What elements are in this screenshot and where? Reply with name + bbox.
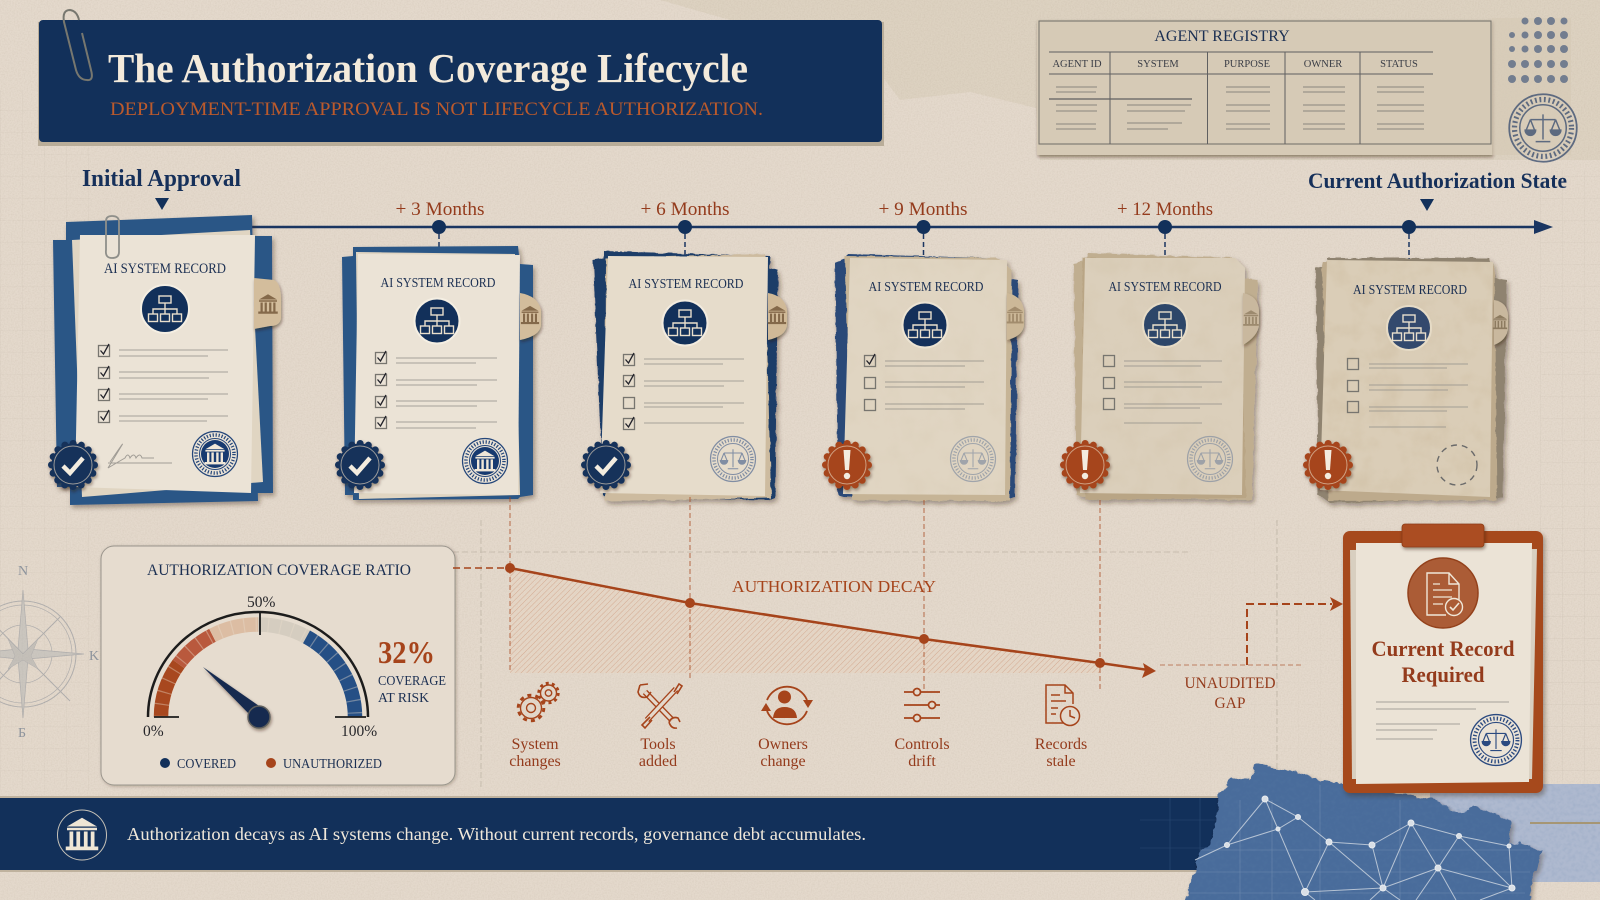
registry column headers: OWNER xyxy=(1304,59,1342,70)
icon: records stale xyxy=(1046,685,1080,726)
footer band xyxy=(0,796,1240,872)
month labels: + 6 Months xyxy=(640,200,730,220)
gauge title: AUTHORIZATION COVERAGE RATIO xyxy=(147,562,411,579)
aged stains xyxy=(1320,260,1493,497)
callout label: GAP xyxy=(1214,695,1246,712)
missing seal placeholder xyxy=(1437,445,1477,485)
icon: footer institution xyxy=(58,810,106,860)
record title: AI SYSTEM RECORD xyxy=(868,280,984,295)
org icon xyxy=(1387,306,1431,350)
org icon xyxy=(662,300,708,346)
seal xyxy=(462,438,508,484)
checklist xyxy=(624,353,744,430)
card 5: twelve months xyxy=(1064,253,1259,500)
tab xyxy=(254,278,281,329)
tab xyxy=(1243,293,1259,345)
registry seal xyxy=(1509,94,1577,162)
driver labels xyxy=(509,736,1087,770)
icon: system changes xyxy=(518,683,558,721)
checklist xyxy=(864,354,984,410)
card 6: current state xyxy=(1306,258,1508,503)
compass rose xyxy=(0,590,84,718)
panel: authorization coverage ratio gauge xyxy=(101,546,455,785)
checklist xyxy=(376,351,497,428)
clip xyxy=(1402,524,1484,547)
record message: Required xyxy=(1402,662,1484,687)
gauge scale labels: 0% xyxy=(143,723,164,740)
record title: AI SYSTEM RECORD xyxy=(380,276,496,291)
record message xyxy=(1372,636,1514,687)
needle xyxy=(203,667,270,728)
driver labels: added xyxy=(639,753,677,770)
tab xyxy=(520,293,541,340)
tab xyxy=(1007,293,1024,340)
card 3: six months xyxy=(584,251,787,501)
driver labels: Records xyxy=(1035,736,1087,753)
callout label: UNAUDITED xyxy=(1184,675,1276,692)
dashed arrow xyxy=(1247,604,1332,665)
coverage value: 32% xyxy=(378,634,435,670)
coverage caption: COVERAGE xyxy=(378,673,446,688)
legend xyxy=(160,756,382,771)
checklist xyxy=(98,344,228,422)
initial approval marker xyxy=(155,198,169,210)
registry column headers: PURPOSE xyxy=(1224,59,1270,70)
tab xyxy=(768,293,787,340)
record title: AI SYSTEM RECORD xyxy=(104,261,226,277)
title banner xyxy=(38,20,884,146)
org icon xyxy=(1143,303,1187,347)
driver labels: change xyxy=(760,753,806,770)
coverage caption xyxy=(378,673,446,705)
registry column headers: AGENT ID xyxy=(1052,59,1102,70)
icon: controls drift xyxy=(904,688,940,722)
checklist xyxy=(1104,356,1222,423)
icon: banner paperclip xyxy=(64,10,92,80)
record message: Current Record xyxy=(1372,636,1514,661)
org icon xyxy=(141,285,189,333)
tab xyxy=(1493,300,1508,345)
month labels: + 12 Months xyxy=(1117,200,1213,220)
subtitle: DEPLOYMENT-TIME APPROVAL IS NOT LIFECYCLE AUTHORIZATION. xyxy=(110,99,763,120)
status badge xyxy=(338,444,382,486)
driver labels: Controls xyxy=(894,736,950,753)
gauge arc xyxy=(148,612,368,717)
gauge scale labels xyxy=(143,594,377,740)
legend: UNAUTHORIZED xyxy=(283,756,382,771)
month labels: + 9 Months xyxy=(878,200,968,220)
registry column headers: STATUS xyxy=(1380,59,1418,70)
agent registry panel xyxy=(1037,20,1492,155)
record title: AI SYSTEM RECORD xyxy=(1108,280,1222,295)
card 4: nine months xyxy=(826,254,1024,501)
icon: tools xyxy=(638,684,682,728)
registry column headers: SYSTEM xyxy=(1137,59,1179,70)
current state label: Current Authorization State xyxy=(1308,168,1567,193)
paperclip xyxy=(106,216,119,258)
initial approval label: Initial Approval xyxy=(82,166,241,192)
coverage caption: AT RISK xyxy=(378,690,429,705)
driver labels: drift xyxy=(908,753,936,770)
gauge scale labels: 50% xyxy=(247,594,276,611)
month labels xyxy=(396,200,1213,220)
faded seal xyxy=(950,436,996,482)
network lines xyxy=(1195,799,1512,900)
current state marker xyxy=(1420,199,1434,211)
warning badge xyxy=(826,444,868,486)
icon: owners change xyxy=(761,687,813,724)
status badge xyxy=(52,444,94,486)
compass letters: Б xyxy=(18,726,26,741)
warning badge xyxy=(1306,444,1350,486)
driver labels: System xyxy=(511,736,559,753)
faded seal xyxy=(1188,436,1232,482)
month labels: + 3 Months xyxy=(396,200,484,220)
callout label xyxy=(1184,675,1276,712)
icon: document with check xyxy=(1408,558,1478,628)
aged stains xyxy=(843,258,1007,495)
compass letters: K xyxy=(89,649,99,664)
timeline xyxy=(82,166,1567,260)
driver labels: Owners xyxy=(758,736,808,753)
unaudited gap callout xyxy=(1160,597,1343,712)
checklist xyxy=(1348,358,1468,427)
torn blueprint paper xyxy=(1183,765,1542,900)
title: The Authorization Coverage Lifecycle xyxy=(108,45,748,91)
clipboard: current record required xyxy=(1343,524,1543,793)
org icon xyxy=(414,298,460,344)
gauge scale labels: 100% xyxy=(341,723,377,740)
footer message: Authorization decays as AI systems change. Without current records, governance debt accumulates. xyxy=(127,824,866,844)
record title: AI SYSTEM RECORD xyxy=(628,277,744,292)
record title: AI SYSTEM RECORD xyxy=(1353,283,1467,298)
card 1: initial approval record xyxy=(52,215,281,505)
chart label: AUTHORIZATION DECAY xyxy=(732,577,936,596)
compass letters: N xyxy=(18,564,28,579)
driver labels: Tools xyxy=(640,736,676,753)
seal xyxy=(192,432,238,476)
org icon xyxy=(902,302,948,348)
seal xyxy=(1471,715,1521,765)
status badge xyxy=(584,444,628,486)
aged stains xyxy=(1080,258,1245,495)
network nodes xyxy=(1224,796,1515,896)
registry halftone dots xyxy=(1492,17,1571,155)
driver labels: changes xyxy=(509,753,561,770)
registry column headers xyxy=(1052,59,1418,70)
light blue torn strip xyxy=(1430,784,1600,882)
signature xyxy=(108,444,172,468)
registry heading: AGENT REGISTRY xyxy=(1154,28,1290,45)
card 2: three months xyxy=(338,246,541,500)
warning badge xyxy=(1064,444,1106,486)
faded seal xyxy=(710,436,756,482)
authorization decay chart xyxy=(453,497,1156,690)
legend: COVERED xyxy=(177,756,236,771)
compass letters xyxy=(18,564,99,741)
driver labels: stale xyxy=(1046,753,1076,770)
